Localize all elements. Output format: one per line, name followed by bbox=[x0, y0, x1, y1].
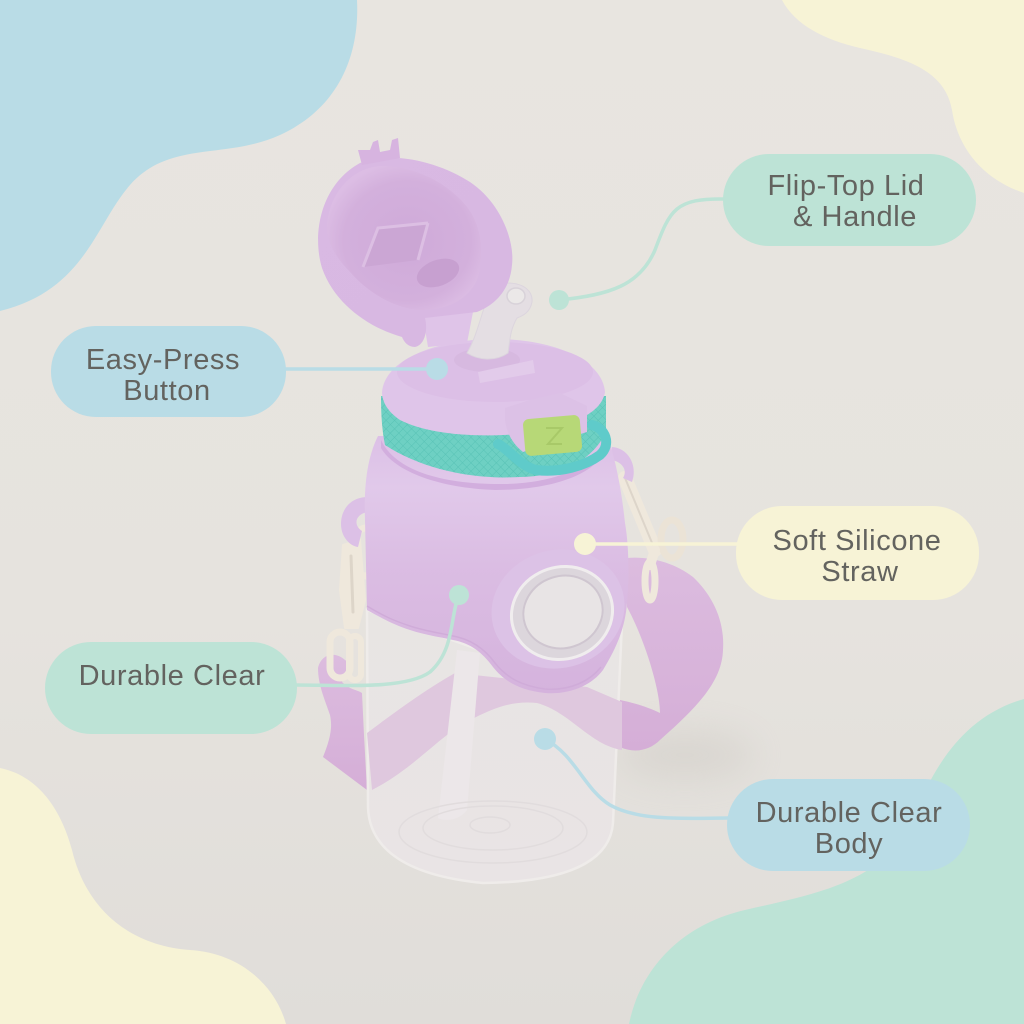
sleeve lower rim bbox=[367, 606, 601, 689]
water bottle illustration bbox=[318, 138, 723, 883]
lilac sleeve bbox=[365, 436, 628, 693]
callout: Durable Clear Body bbox=[534, 728, 970, 871]
lid top recess bbox=[397, 342, 593, 402]
callout: Soft Silicone Straw: Straw bbox=[821, 556, 899, 588]
callout: Durable Clear Body: Durable Clear bbox=[756, 797, 942, 829]
strap: left bbox=[318, 655, 367, 790]
green button bbox=[523, 415, 583, 456]
lilac clip bbox=[505, 393, 587, 452]
teal handle bbox=[498, 425, 606, 471]
lug: left bbox=[341, 497, 368, 547]
straw mouth bbox=[507, 288, 525, 304]
callout: Durable Clear: Durable Clear bbox=[79, 660, 265, 692]
callout: Flip-Top Lid & Handle: & Handle bbox=[793, 201, 917, 233]
strap: right bbox=[620, 558, 723, 751]
blob: bottom-right mint bbox=[629, 699, 1024, 1024]
lid rim highlight bbox=[327, 166, 481, 310]
flip lid outer bbox=[318, 158, 512, 347]
callout: Easy-Press Button: Easy-Press bbox=[86, 344, 240, 376]
window surround bbox=[478, 535, 638, 683]
callout: Soft Silicone Straw bbox=[574, 506, 979, 600]
strap seen through body bbox=[367, 673, 622, 790]
inner lid bracket edges bbox=[363, 223, 428, 267]
callout: Soft Silicone Straw: Soft Silicone bbox=[772, 525, 942, 557]
teal collar bbox=[381, 396, 606, 477]
chain: right bbox=[625, 478, 683, 600]
lid base bbox=[382, 339, 605, 435]
lug: right bbox=[612, 447, 634, 482]
inner lid oval bbox=[413, 253, 463, 293]
lid hinge bbox=[423, 312, 473, 347]
blob: bottom-left cream bbox=[0, 768, 286, 1024]
straw base bbox=[454, 348, 520, 372]
inner straw bbox=[438, 650, 480, 820]
silicone straw bbox=[467, 283, 532, 359]
collar underside bbox=[381, 440, 605, 490]
blob: top-right cream bbox=[782, 0, 1024, 193]
callout: Durable Clear Body: Body bbox=[815, 828, 883, 860]
base rings bbox=[399, 801, 587, 863]
callout: Flip-Top Lid & Handle: Flip-Top Lid bbox=[767, 170, 925, 202]
window glass bbox=[514, 565, 612, 659]
bottle shadow bbox=[615, 731, 755, 779]
window lens bbox=[499, 553, 625, 673]
lid tab bbox=[358, 138, 400, 165]
callout: Easy-Press Button: Button bbox=[123, 375, 211, 407]
clear body bbox=[367, 600, 623, 883]
button logo bbox=[546, 428, 562, 444]
blob: top-left blue bbox=[0, 0, 357, 311]
callout: Durable Clear bbox=[45, 585, 469, 734]
straw tab bbox=[478, 360, 535, 383]
callout: Easy-Press Button bbox=[51, 326, 448, 417]
callout: Flip-Top Lid & Handle bbox=[549, 154, 976, 310]
inner lid bracket bbox=[363, 223, 428, 267]
chain: left bbox=[330, 528, 377, 680]
